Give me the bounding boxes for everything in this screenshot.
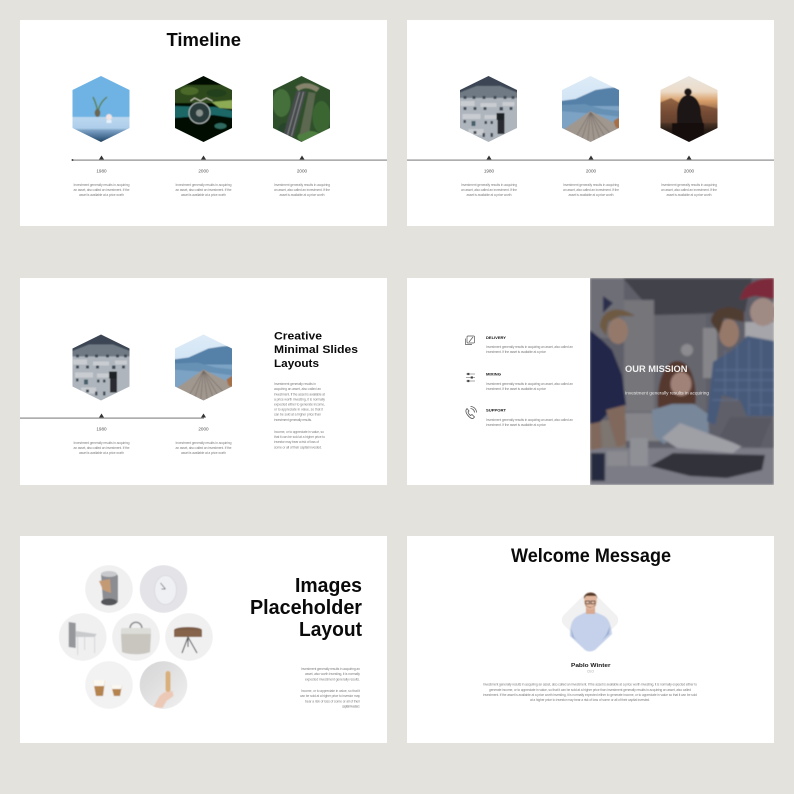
entry 2000 second (661, 168, 717, 197)
icon: telephone (466, 406, 476, 419)
entry 1980: 1980 (96, 168, 107, 174)
body text: expected either to generate income, (274, 402, 325, 406)
subtitle: Investment generally results in acquiring (625, 390, 709, 396)
timeline axis (20, 414, 206, 419)
entry 1980: asset is available at a price worth (79, 451, 124, 455)
image: lake hexagon (562, 76, 619, 142)
title: Timeline: Timeline (166, 29, 241, 50)
body text: capital invested. (342, 705, 360, 709)
entry 1980: an asset, also called an investment. If the (461, 188, 517, 192)
entry 2000: asset is available at a price worth (568, 193, 614, 197)
body text: can be sold at a higher price than (274, 413, 321, 417)
image: hand holding bottle circle (140, 661, 188, 709)
entry 2000 second: Investment generally results in acquiring (274, 183, 330, 187)
entry 1980: Investment generally results in acquiring (461, 183, 517, 187)
body text: bear a risk of loss of some or all of their (305, 699, 361, 703)
entry 2000: asset is available at a price worth (181, 193, 226, 197)
item: support: Investment generally results in acquiring an asset, also called an (486, 418, 573, 422)
entry 1980: Investment generally results in acquiring (74, 183, 130, 187)
item: mixing: investment. If the asset is available at a price (486, 387, 546, 391)
item: support: investment. If the asset is available at a price (486, 423, 546, 427)
body text: can be sold at a higher price to investor may (300, 694, 360, 698)
entry 1980: 1980 (484, 168, 495, 174)
body text: investment. If the asset is available at (274, 392, 325, 396)
body text (274, 382, 325, 449)
image: crushed can circle (85, 565, 133, 613)
body text: that it can be sold at a higher price to (274, 435, 325, 439)
entry 2000 second: asset is available at a price worth (666, 193, 712, 197)
entry 2000 (563, 168, 619, 197)
entry 2000 second: Investment generally results in acquiring (661, 183, 717, 187)
title: welcome message: Welcome Message (511, 546, 671, 567)
image: wall clock circle (140, 565, 188, 613)
heading: creative minimal slides layouts: Layouts (274, 358, 319, 370)
panel: creative minimal slides layout (20, 278, 387, 485)
entry 2000: Investment generally results in acquiring (176, 183, 232, 187)
body text: a price worth investing, it is normally (274, 397, 325, 401)
heading: creative minimal slides layouts: Creative (274, 330, 322, 342)
entry 2000: 2000 (198, 168, 209, 174)
panel: our mission (407, 278, 776, 485)
item: mixing: MIXING (486, 372, 501, 376)
image: building hexagon (72, 334, 130, 400)
heading: images placeholder layout (250, 574, 362, 641)
marker 1980 (99, 414, 104, 418)
icon: delivery box (466, 336, 474, 344)
marker 2000 (201, 156, 206, 160)
role: CEO: CEO (587, 670, 594, 674)
body text: Investment generally results in acquiring an (301, 667, 360, 671)
heading: images placeholder layout: Placeholder (250, 596, 362, 619)
entry 1980: an asset, also called an investment. If the (74, 446, 130, 450)
entry 2000: an asset, also called an investment. If the (176, 188, 232, 192)
body text: Investment generally results in acquiring an asset, also called an investment. If the asset is available at a price worth investing, it is normally expected either to (483, 683, 697, 687)
item: mixing (466, 372, 573, 391)
item: support (466, 406, 573, 427)
entry 1980: asset is available at a price worth (79, 193, 124, 197)
panel: timeline slide two (407, 20, 774, 226)
marker 2000 (201, 414, 206, 418)
body text: generate income, or to appreciate in value, so that it can be sold at a higher price than investment generally results in acquiring an asset, also called (489, 688, 691, 692)
marker 2000 second (686, 156, 692, 160)
entry 1980: 1980 (96, 426, 107, 432)
image: ceramic cups circle (85, 661, 133, 709)
body text: acquiring an asset, also called an (274, 387, 321, 391)
item: mixing: Investment generally results in acquiring an asset, also called an (486, 382, 573, 386)
icon: mixing sliders (466, 373, 475, 382)
photo: team around laptop (590, 278, 776, 485)
entry 2000: asset is available at a price worth (181, 451, 226, 455)
item: delivery: DELIVERY (486, 335, 506, 340)
entry 2000 (176, 426, 232, 455)
panel: timeline slide one (20, 20, 387, 226)
entry 1980: Investment generally results in acquiring (74, 441, 130, 445)
entry 2000 second (274, 168, 330, 197)
body text: or to appreciate in value, so that it (274, 408, 323, 412)
body text: Income, or to appreciate in value, so (274, 430, 324, 434)
panel: welcome message (407, 536, 774, 743)
heading: images placeholder layout: Images (295, 574, 362, 597)
body text: at a higher price to investor may bear a risk of loss of some or all of their capital invested. (530, 698, 650, 702)
entry 1980 (74, 168, 130, 197)
entry 1980 (74, 426, 130, 455)
body text: investment. If the asset is available at a price worth investing, it is normally expected either to generate income, or to appreciate in value so that it can be sold (483, 693, 697, 697)
heading: images placeholder layout: Layout (299, 618, 362, 641)
entry 2000: 2000 (198, 426, 209, 432)
marker 2000 second (300, 156, 304, 160)
entry 2000 (176, 168, 232, 197)
image: lake hexagon (175, 334, 232, 400)
body text (300, 667, 361, 709)
entry 2000: an asset, also called an investment. If the (563, 188, 619, 192)
timeline axis (407, 156, 774, 161)
image: vintage car hexagon (175, 76, 232, 142)
item: delivery (466, 335, 573, 354)
body text: asset, also worth investing, it is normally (305, 672, 360, 676)
entry 2000 second: 2000 (297, 168, 308, 174)
image: building hexagon (460, 76, 517, 142)
item: support: SUPPORT (486, 408, 507, 412)
body text: investor may bear a risk of loss of (274, 440, 319, 444)
body text: some or all of their capital invested. (274, 445, 322, 449)
marker 1980 (99, 156, 104, 160)
item: delivery: investment. If the asset is available at a price (486, 350, 546, 354)
image: chair circle (59, 613, 107, 661)
entry 1980: an asset, also called an investment. If the (74, 188, 130, 192)
timeline axis (72, 156, 387, 161)
panel: images placeholder layout (20, 536, 387, 743)
entry 2000: an asset, also called an investment. If the (176, 446, 232, 450)
image: blue still life hexagon (72, 76, 130, 142)
body text: Income, or to appreciate in value, so that it (301, 689, 360, 693)
entry 2000: 2000 (586, 168, 597, 174)
heading: creative minimal slides layouts (274, 330, 358, 370)
item: delivery: Investment generally results in acquiring an asset, also called an (486, 345, 573, 349)
entry 1980 (461, 168, 517, 197)
name: Pablo Winter: Pablo Winter (571, 663, 612, 669)
image: side table circle (165, 613, 213, 661)
entry 2000 second: 2000 (684, 168, 695, 174)
image: bag circle (112, 613, 160, 661)
body text: Investment generally results in (274, 382, 316, 386)
marker 2000 (588, 156, 594, 160)
body text: investment generally results. (274, 418, 312, 422)
entry 1980: asset is available at a price worth (466, 193, 512, 197)
image: forest tunnel hexagon (273, 76, 330, 142)
body text (483, 683, 697, 702)
entry 2000 second: an asset, also called an investment. If the (661, 188, 717, 192)
entry 2000: Investment generally results in acquiring (563, 183, 619, 187)
heading: creative minimal slides layouts: Minimal Slides (274, 344, 358, 356)
entry 2000 second: an asset, also called an investment. If the (274, 188, 330, 192)
heading: our mission: OUR MISSION (625, 364, 688, 374)
image: sunset silhouette hexagon (660, 76, 718, 142)
entry 2000 second: asset is available at a price worth (280, 193, 325, 197)
entry 2000: Investment generally results in acquiring (176, 441, 232, 445)
body text: expected investment generally results. (305, 677, 360, 681)
marker 1980 (486, 156, 492, 160)
portrait: man with glasses on diamond (559, 589, 621, 652)
